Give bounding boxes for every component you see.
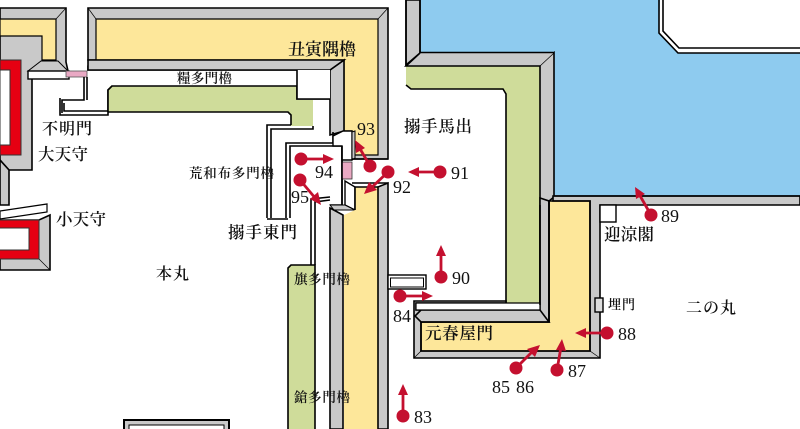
- upper wall band: yellow rampart: [88, 8, 388, 159]
- south yellow rampart: [414, 196, 800, 358]
- label: 二の丸: 二の丸: [686, 299, 736, 317]
- marker 87: [550, 339, 586, 381]
- marker 94: [294, 152, 334, 182]
- label: 迎涼閣: 迎涼閣: [604, 225, 654, 244]
- small pavilion box and buried gate: [595, 205, 616, 312]
- label: 本丸: 本丸: [156, 265, 189, 283]
- marker 84: [393, 290, 433, 326]
- label: 搦手東門: 搦手東門: [228, 222, 297, 242]
- marker 88: 88: [618, 324, 636, 344]
- north-east green rampart: [406, 0, 554, 322]
- label: 搦手馬出: 搦手馬出: [404, 116, 472, 136]
- marker 89: [635, 187, 679, 226]
- label: 旗多門櫓: 旗多門櫓: [294, 271, 350, 287]
- east gate towers: [330, 131, 388, 210]
- marker 93: [355, 119, 376, 172]
- marker 90: [434, 245, 470, 288]
- label: 糧多門櫓: 糧多門櫓: [177, 70, 232, 86]
- marker 94: 94: [315, 162, 333, 182]
- marker 95: [291, 174, 321, 207]
- gate: pink bridge at 不明門: [60, 71, 112, 115]
- marker 85 86: 86: [516, 377, 534, 397]
- label: 不明門: 不明門: [42, 120, 92, 138]
- marker 83: 83: [414, 407, 432, 427]
- label: 鎗多門櫓: 鎗多門櫓: [294, 389, 350, 405]
- marker 85 86: 85: [492, 377, 510, 397]
- small gate box: [388, 275, 426, 289]
- marker 93: 93: [357, 119, 375, 139]
- label: 小天守: 小天守: [56, 210, 106, 229]
- label: 大天守: 大天守: [38, 145, 88, 164]
- marker 85 86: [492, 345, 540, 397]
- east gate walls: [267, 125, 342, 265]
- marker 92: [364, 166, 411, 197]
- inner yagura green: [108, 70, 330, 126]
- marker 87: 87: [568, 361, 586, 381]
- label: 埋門: 埋門: [608, 297, 635, 312]
- marker 95: 95: [291, 187, 309, 207]
- marker 92: 92: [393, 177, 411, 197]
- small keep: [0, 204, 50, 270]
- label: 丑寅隅櫓: 丑寅隅櫓: [288, 40, 357, 59]
- lower left green yagura: [288, 265, 315, 429]
- marker 84: 84: [393, 306, 411, 326]
- label: 荒和布多門櫓: 荒和布多門櫓: [189, 165, 274, 181]
- bottom building: [124, 420, 229, 429]
- island outline in moat: [659, 0, 800, 53]
- main keep wall: left: [0, 8, 69, 205]
- moat water: [420, 0, 800, 196]
- marker 90: 90: [452, 268, 470, 288]
- lower wall band: yellow rampart: [330, 183, 388, 429]
- marker 91: 91: [451, 163, 469, 183]
- marker 83: [396, 384, 432, 427]
- marker 89: 89: [661, 206, 679, 226]
- marker 91: [408, 163, 469, 183]
- label: 元春屋門: 元春屋門: [425, 324, 493, 343]
- marker 88: [575, 324, 636, 344]
